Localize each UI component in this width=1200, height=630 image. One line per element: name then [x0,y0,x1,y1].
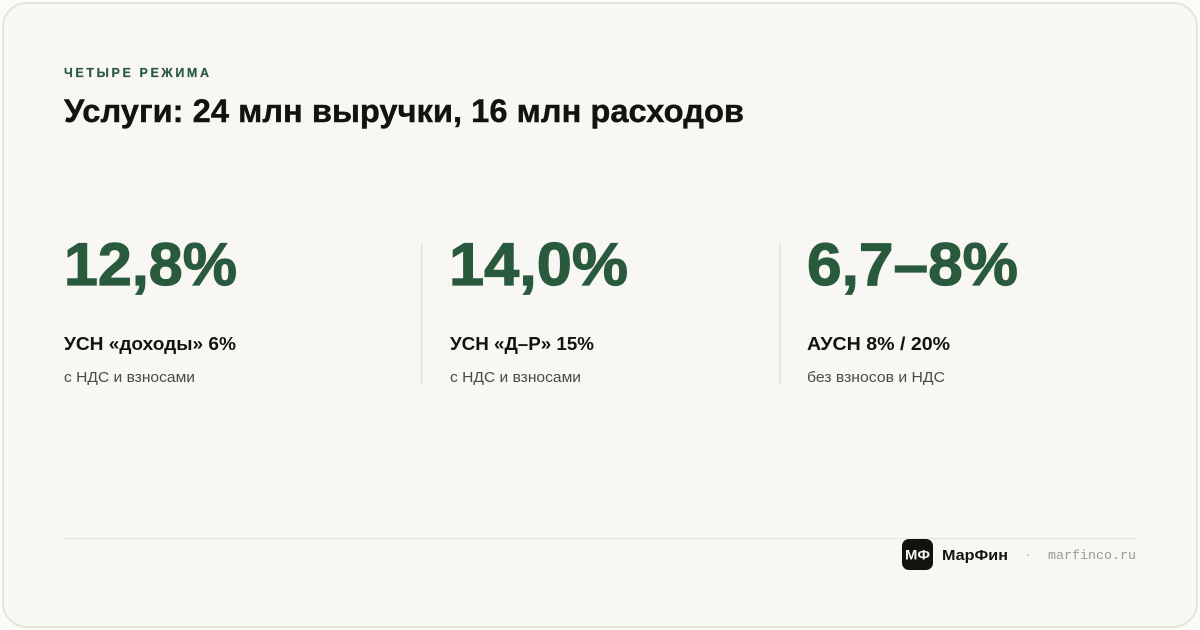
title: Услуги: 24 млн выручки, 16 млн расходов [64,93,744,129]
label: УСН «Д–Р» 15% [450,334,594,354]
logo: МФ [905,546,930,562]
note: без взносов и НДС [807,369,945,386]
note: с НДС и взносами [450,369,581,386]
footer brand [902,539,1136,570]
value: 6,7–8% [807,231,1018,298]
stat: USN income [64,231,237,386]
note: с НДС и взносами [64,369,195,386]
label: УСН «доходы» 6% [64,334,236,354]
eyebrow: ЧЕТЫРЕ РЕЖИМА [64,66,209,80]
website: marfinco.ru [1048,548,1136,563]
brand name: МарФин [942,547,1008,564]
separator dot: · [1026,547,1030,562]
value: 14,0% [449,231,628,298]
logo [902,539,933,570]
value: 12,8% [64,231,237,298]
stat: USN income minus expenses [449,231,628,386]
label: АУСН 8% / 20% [807,334,950,354]
stat: AUSN [807,231,1018,386]
